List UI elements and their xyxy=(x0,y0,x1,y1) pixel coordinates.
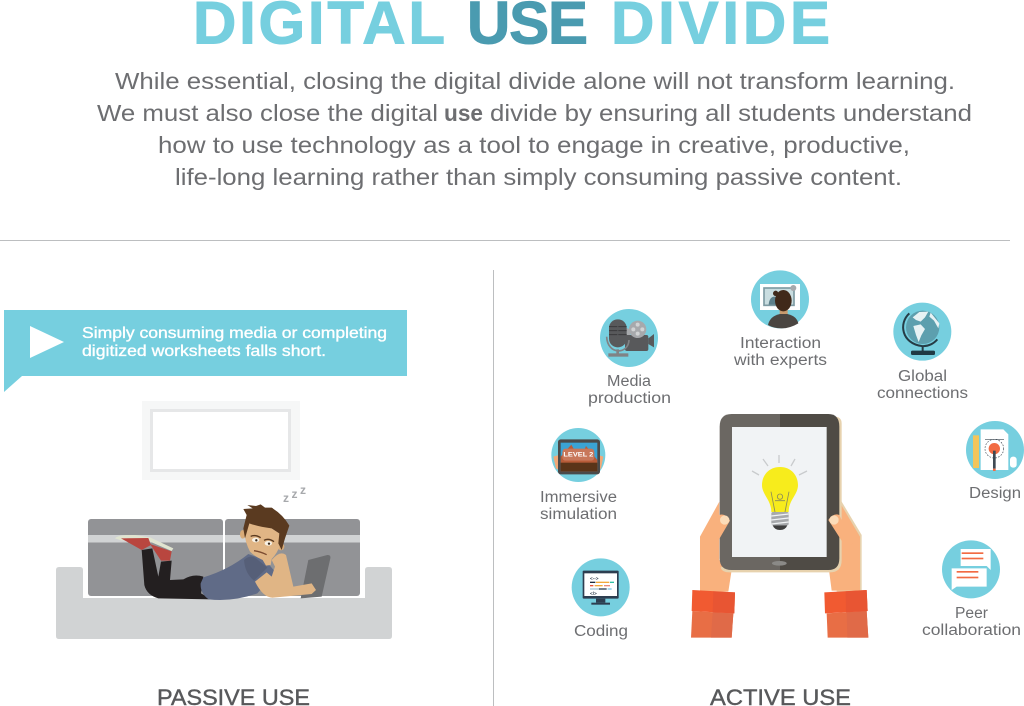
label: immersive simulation: simulation xyxy=(540,506,617,523)
label: interaction with experts: with experts xyxy=(733,352,827,369)
label: global connections xyxy=(877,368,968,402)
icon: interaction with experts xyxy=(751,270,809,328)
intro text block: We must also close the digital xyxy=(97,100,438,126)
label: media production: production xyxy=(588,390,671,407)
icon: peer collaboration xyxy=(942,540,1000,598)
picture frame xyxy=(142,401,300,480)
label: immersive simulation: Immersive xyxy=(540,489,617,506)
callout banner xyxy=(4,310,407,392)
label: peer collaboration xyxy=(922,605,1021,639)
sleeping z letters: z xyxy=(292,487,298,501)
hands xyxy=(837,500,862,592)
intro text block: While essential, closing the digital divide alone will not transform learning. xyxy=(115,68,955,94)
callout banner: Simply consuming media or completing xyxy=(82,325,387,342)
label: media production xyxy=(588,373,671,407)
intro text block: divide by ensuring all students understand xyxy=(490,100,972,126)
label: global connections: connections xyxy=(877,385,968,402)
cuffs xyxy=(691,611,733,638)
icon: media production xyxy=(600,309,658,367)
intro text block: use xyxy=(444,100,483,126)
label: interaction with experts: Interaction xyxy=(740,335,821,352)
hands holding tablet xyxy=(691,414,868,638)
lounging student with tablet xyxy=(115,504,330,600)
icon: immersive simulation xyxy=(551,428,605,482)
title xyxy=(193,0,830,56)
callout banner: digitized worksheets falls short. xyxy=(82,343,326,360)
tablet body xyxy=(721,417,842,572)
intro text block: life-long learning rather than simply consuming passive content. xyxy=(175,164,902,190)
icon: coding: <--> xyxy=(590,576,599,581)
sleeping z letters: z xyxy=(300,483,306,497)
intro text block: how to use technology as a tool to engage in creative, productive, xyxy=(158,132,910,158)
icon: immersive simulation: LEVEL 2 xyxy=(563,452,594,459)
sleeping z letters: z xyxy=(283,491,289,505)
head, arm and tablet xyxy=(240,504,330,598)
icon: design xyxy=(966,421,1024,479)
sleeping z letters xyxy=(283,483,306,505)
label: immersive simulation xyxy=(540,489,617,523)
light bulb xyxy=(762,467,798,530)
legs and shoes xyxy=(115,535,212,599)
intro text block xyxy=(97,68,972,190)
panel: active use xyxy=(540,270,1024,706)
label: interaction with experts xyxy=(733,335,827,369)
icon: light rays xyxy=(752,455,807,475)
icon: global connections xyxy=(893,303,951,361)
icon: coding xyxy=(572,558,630,616)
thumbs xyxy=(705,514,730,545)
label: global connections: Global xyxy=(898,368,947,385)
label: peer collaboration: Peer xyxy=(955,605,988,622)
shirt xyxy=(201,554,280,600)
label: media production: Media xyxy=(607,373,651,390)
sofa xyxy=(56,519,392,639)
label: coding: Coding xyxy=(574,623,628,640)
panel: passive use xyxy=(4,310,407,706)
icon: coding: </> xyxy=(590,591,597,596)
label: peer collaboration: collaboration xyxy=(922,622,1021,639)
tablet screen xyxy=(732,427,827,557)
label: design: Design xyxy=(969,485,1021,502)
